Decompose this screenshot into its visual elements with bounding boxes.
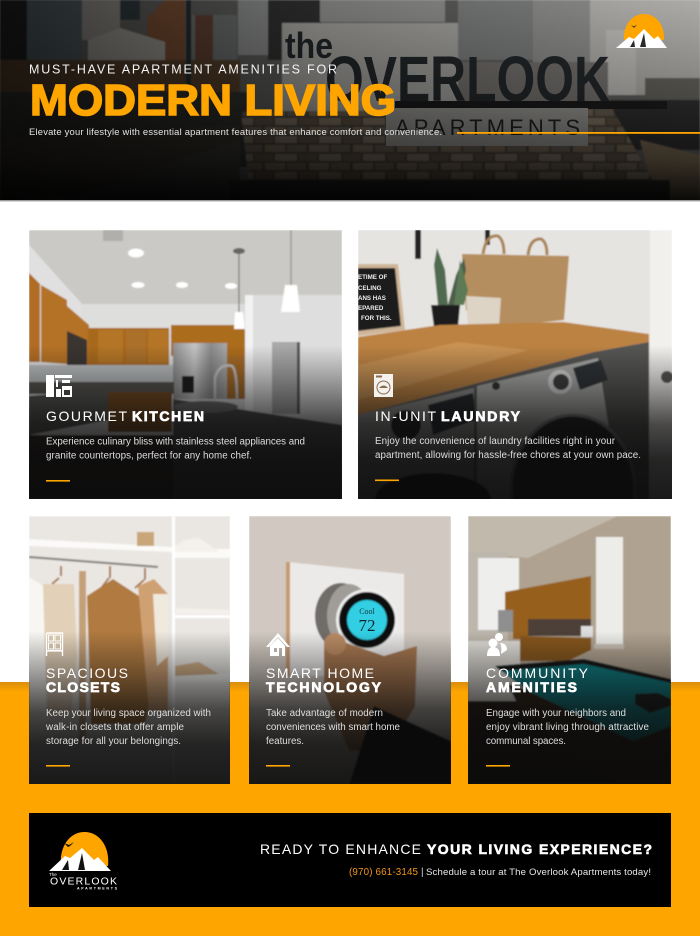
heading: smart home technology: SMART HOME xyxy=(266,665,374,681)
body: gourmet kitchen: Experience culinary bliss with stainless steel appliances and xyxy=(46,436,305,448)
logo: the overlook apartments xyxy=(49,832,118,890)
panel: spacious closets xyxy=(29,516,230,784)
heading: gourmet kitchen: GOURMET xyxy=(46,408,127,424)
body: spacious closets: Keep your living space organized with xyxy=(46,708,211,719)
letter board text: CELING xyxy=(358,285,382,292)
heading: in-unit laundry xyxy=(375,408,521,424)
cta heading: READY TO ENHANCE xyxy=(260,841,421,857)
letter board text: ANS HAS xyxy=(358,295,386,302)
heading: community amenities: COMMUNITY xyxy=(486,665,589,681)
body: spacious closets xyxy=(45,708,211,747)
header orange rule xyxy=(457,132,700,134)
accent rule xyxy=(46,480,70,482)
body: smart home technology: features. xyxy=(266,736,304,747)
body: in-unit laundry: apartment, allowing for hassle-free chores at your own pace. xyxy=(375,450,641,461)
heading: community amenities xyxy=(486,665,589,695)
body: smart home technology: Take advantage of modern xyxy=(266,708,383,719)
letter board text: FOR THIS. xyxy=(361,315,392,322)
cta heading xyxy=(260,841,652,857)
heading: gourmet kitchen xyxy=(46,408,204,424)
thermostat text: Cool xyxy=(359,607,376,616)
photo: kitchen xyxy=(29,230,342,499)
body: community amenities xyxy=(486,708,650,747)
sign text: overlook: OVERLOOK xyxy=(325,43,610,115)
panel: gourmet kitchen xyxy=(29,230,342,499)
body: spacious closets: walk-in closets that offer ample xyxy=(45,722,185,733)
logo: top right xyxy=(616,14,667,48)
photo: closet xyxy=(29,516,230,784)
body: gourmet kitchen: granite countertops, perfect for any home chef. xyxy=(46,450,252,462)
letter board text: ETIME OF xyxy=(358,274,387,281)
photo: laundry xyxy=(358,230,672,499)
photo: clubhouse xyxy=(468,516,671,784)
header photo: apartment sign xyxy=(0,0,700,200)
body: community amenities: Engage with your neighbors and xyxy=(486,708,626,719)
heading: smart home technology: TECHNOLOGY xyxy=(266,679,382,695)
heading: in-unit laundry: IN-UNIT xyxy=(375,408,436,424)
heading: spacious closets: SPACIOUS xyxy=(46,665,128,681)
thermostat temperature: 72 xyxy=(358,616,376,635)
cta contact line: | xyxy=(421,867,424,878)
accent rule xyxy=(486,765,510,767)
heading: gourmet kitchen: KITCHEN xyxy=(132,408,204,424)
logo: the overlook apartments: APARTMENTS xyxy=(77,886,118,890)
cta contact line: Schedule a tour at The Overlook Apartments today! xyxy=(426,867,651,878)
icon: kitchen xyxy=(46,375,72,397)
icon: people xyxy=(487,633,507,656)
panel: in-unit laundry xyxy=(358,230,673,565)
body: in-unit laundry: Enjoy the convenience of laundry facilities right in your xyxy=(375,436,616,447)
heading: in-unit laundry: LAUNDRY xyxy=(441,408,521,424)
icon: closet xyxy=(46,633,62,656)
sign text: apartments: APARTMENTS xyxy=(395,115,580,140)
call to action panel xyxy=(29,813,671,907)
letter board text: EPARED xyxy=(358,305,384,312)
body: community amenities: enjoy vibrant living through attractive xyxy=(486,722,650,733)
icon: house xyxy=(266,633,290,656)
heading: smart home technology xyxy=(266,665,382,695)
heading: spacious closets: CLOSETS xyxy=(46,679,120,695)
main title: MODERN LIVING xyxy=(30,76,396,125)
body: in-unit laundry xyxy=(375,436,641,461)
letter board text xyxy=(358,274,392,322)
accent rule xyxy=(46,765,70,767)
accent rule xyxy=(266,765,290,767)
logo: the overlook apartments: The xyxy=(49,872,57,877)
body: smart home technology: conveniences with smart home xyxy=(266,722,401,733)
photo: thermostat xyxy=(249,516,451,784)
sign text: the: the xyxy=(285,25,333,66)
heading: spacious closets xyxy=(46,665,128,695)
header subtitle: Elevate your lifestyle with essential apartment features that enhance comfort and convenience. xyxy=(29,126,442,137)
header banner xyxy=(0,0,700,201)
cta heading: YOUR LIVING EXPERIENCE? xyxy=(427,841,652,857)
panel: smart home technology xyxy=(249,516,451,784)
icon: washing machine xyxy=(374,374,393,397)
body: gourmet kitchen xyxy=(46,436,305,462)
cta contact line: (970) 661-3145 xyxy=(349,867,419,878)
heading: community amenities: AMENITIES xyxy=(486,679,577,695)
logo: the overlook apartments: OVERLOOK xyxy=(50,876,117,888)
body: spacious closets: storage for all your belongings. xyxy=(46,736,181,747)
panel: community amenities xyxy=(468,516,671,784)
header eyebrow: MUST-HAVE APARTMENT AMENITIES FOR xyxy=(29,62,337,76)
body: smart home technology xyxy=(266,708,401,747)
body: community amenities: communal spaces. xyxy=(486,736,566,747)
accent rule xyxy=(375,480,399,481)
